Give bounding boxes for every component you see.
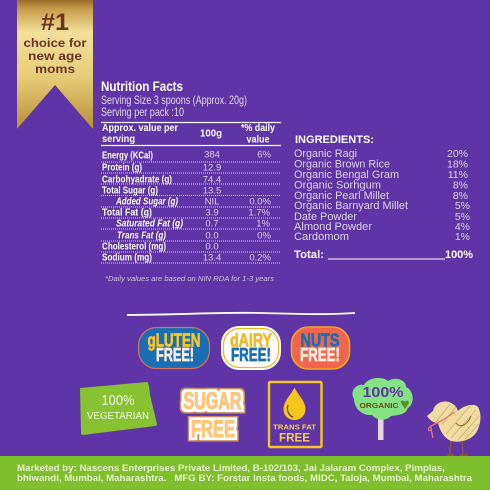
nutrition table: 1% [256, 218, 271, 230]
nutrition table: value [246, 134, 270, 146]
ingredients panel: Almond Powder [294, 221, 372, 233]
nutrition table: 384 [204, 150, 220, 160]
ingredients panel: 8% [453, 190, 468, 202]
nutrition table: serving [102, 133, 135, 145]
nutrition table: NIL [205, 196, 219, 208]
ingredients panel: INGREDIENTS: [295, 134, 374, 146]
ribbon: #1 choice for new age moms: choice for [24, 38, 87, 50]
nutrition table: Approx. value per [102, 122, 178, 134]
badge: dairy free [221, 326, 281, 370]
badge: gluten free [138, 328, 210, 368]
ingredients panel: 8% [453, 180, 468, 192]
ingredients panel: 20% [447, 148, 468, 160]
ingredients panel: 5% [455, 200, 470, 212]
badge: nuts free: NUTS [300, 330, 340, 350]
nutrition table: 0.0 [205, 242, 219, 252]
nutrition table: Energy (KCal) [102, 150, 153, 162]
badge: trans fat free: FREE [279, 430, 310, 444]
badge: gluten free: gLUTEN [148, 330, 200, 350]
nutrition table: *% daily [241, 122, 275, 134]
ingredients panel: 5% [455, 211, 470, 223]
ingredients panel: 18% [447, 158, 468, 170]
ingredients panel: Cardomom [294, 231, 349, 243]
ingredients panel: Organic Ragi [294, 148, 357, 160]
nutrition table: 12.9 [203, 162, 221, 174]
nutrition heading: Serving per pack :10 [101, 105, 184, 119]
badge: sugar free: FREE [191, 416, 235, 443]
ingredients panel [294, 134, 473, 261]
badge: 100% vegetarian [80, 382, 157, 435]
nutrition table: 13.4 [203, 252, 221, 264]
ribbon: #1 choice for new age moms: #1 [41, 9, 69, 36]
badge: 100% vegetarian: 100% [102, 392, 134, 409]
nutrition table: 74.4 [203, 174, 221, 186]
footer band [0, 456, 490, 490]
ingredients panel: Organic Sorhgum [294, 180, 381, 192]
nutrition table: Total Fat (g) [102, 206, 152, 218]
nutrition heading [101, 78, 247, 119]
nutrition table: 1.7% [248, 208, 271, 218]
badge: nuts free [292, 327, 350, 369]
badge: 100% organic tree: 100% [362, 385, 404, 401]
nutrition table: 0.0% [249, 196, 272, 208]
ribbon: #1 choice for new age moms: moms [35, 64, 75, 76]
badge: 100% vegetarian: VEGETARIAN [87, 410, 149, 422]
ingredients panel: 11% [448, 169, 468, 181]
nutrition table: 0% [257, 230, 272, 242]
ribbon: #1 choice for new age moms: new age [28, 51, 82, 63]
ingredients panel: 1% [455, 231, 470, 243]
nutrition table: 0.2% [249, 252, 272, 264]
nutrition table: 0.7 [205, 218, 219, 230]
nutrition table: Trans Fat (g) [117, 230, 166, 242]
nutrition heading: Serving Size 3 spoons (Approx. 20g) [101, 93, 247, 107]
nutrition table: Carbohyadrate (g) [102, 174, 172, 186]
ingredients panel: Organic Pearl Millet [294, 190, 389, 202]
footer band: Marketed by: Nascens Enterprises Private Limited, B-102/103, Jai Jalaram Complex, Pimplas, [17, 463, 445, 474]
nutrition table: 0.0 [205, 230, 219, 242]
ingredients panel: 4% [455, 221, 470, 233]
ingredients panel: Organic Bengal Gram [294, 169, 399, 181]
ingredients panel: Organic Barnyard Millet [294, 200, 408, 212]
nutrition table: 3.9 [205, 208, 219, 218]
ingredients panel: Date Powder [294, 211, 357, 223]
badge: gluten free: FREE! [156, 345, 194, 365]
badge: dairy free: FREE! [231, 345, 271, 365]
nutrition table: Protein (g) [102, 162, 142, 174]
nutrition table: 6% [257, 150, 272, 160]
badge: 100% organic tree: ORGANIC [360, 401, 399, 410]
nutrition table: Total Sugar (g) [102, 184, 158, 196]
nutrition heading: Nutrition Facts [101, 78, 183, 94]
ribbon: #1 choice for new age moms [17, 0, 93, 129]
badge: dairy free: dAIRY [230, 330, 272, 350]
badge: trans fat free: TRANS FAT [273, 424, 317, 432]
badge: 100% organic tree [352, 378, 413, 440]
ingredients panel: Organic Brown Rice [294, 158, 390, 170]
ingredients panel: 100% [445, 249, 473, 261]
badge: nuts free: FREE! [300, 345, 340, 365]
illustration: chick [427, 401, 480, 455]
nutrition table: Cholesterol (mg) [102, 240, 166, 252]
ingredients panel: Total: [294, 249, 324, 261]
badge: sugar free: SUGAR [184, 388, 242, 415]
nutrition table [101, 122, 281, 264]
badge: trans fat free [269, 382, 322, 447]
nutrition table: 100g [200, 128, 222, 140]
nutrition table: 13.5 [203, 186, 221, 196]
footer band: bhiwandi, Mumbai, Maharashtra. MFG BY: Forstar Insta foods, MIDC, Taloja, Mumbai, Maharashtra [17, 473, 473, 484]
nutrition table: Sodium (mg) [102, 252, 152, 264]
footnote: *Daily values are based on NIN RDA for 1-3 years [105, 274, 274, 283]
nutrition table: Added Sugar (g) [115, 196, 178, 208]
badge: sugar free [184, 388, 242, 443]
nutrition table: Saturated Fat (g) [116, 218, 183, 230]
